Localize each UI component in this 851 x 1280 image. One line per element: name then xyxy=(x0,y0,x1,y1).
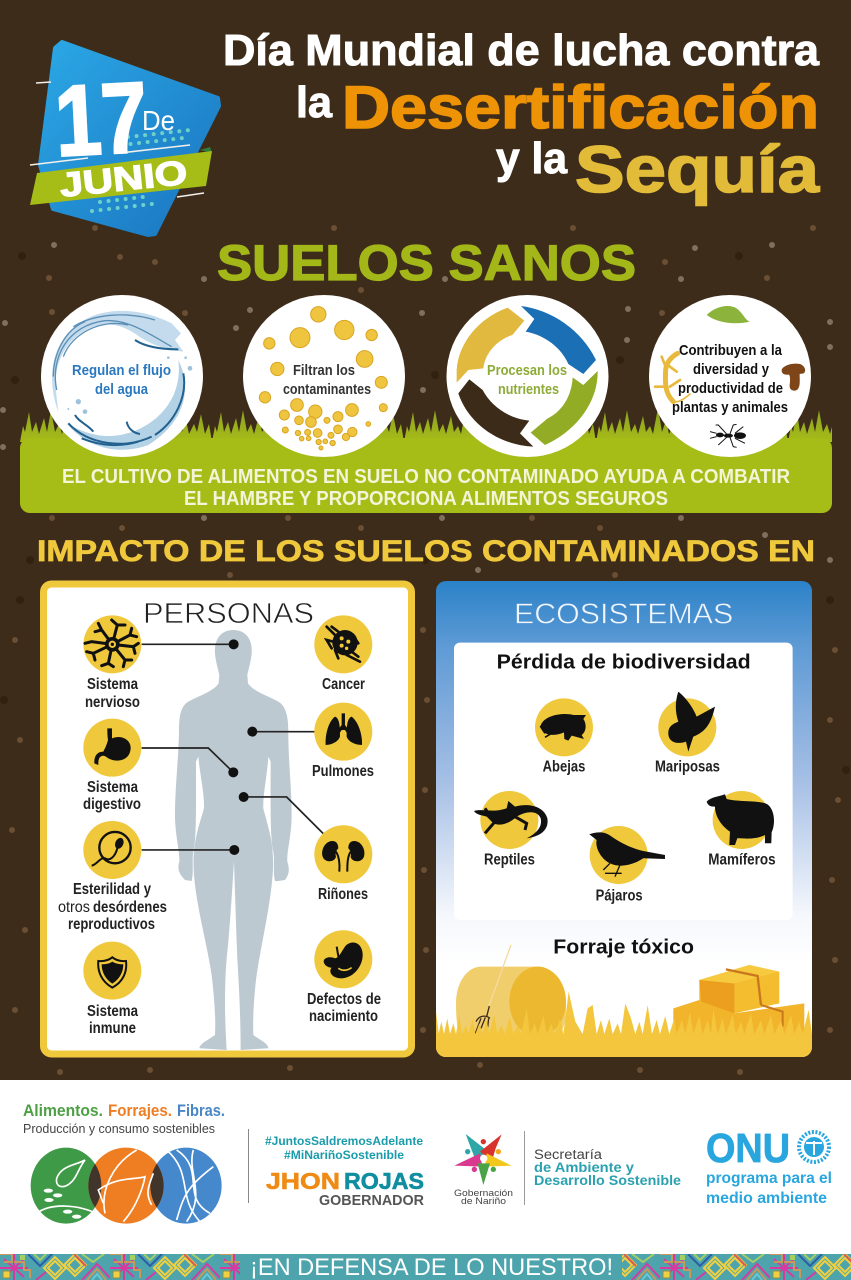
text xyxy=(283,362,371,398)
panel: personas xyxy=(44,584,412,1054)
campaign block: gobernador xyxy=(248,1129,424,1209)
campaign block: gobernador: ROJAS xyxy=(344,1168,424,1194)
labels: inmune xyxy=(89,1020,136,1037)
labels: Sistema xyxy=(87,676,138,693)
icon: bee xyxy=(535,698,593,756)
icon: leaf, gecko, mushroom, ant xyxy=(655,306,805,447)
text: Filtran los xyxy=(293,362,355,379)
heading: suelos sanos: SUELOS SANOS xyxy=(217,235,636,291)
icon: lungs xyxy=(314,703,372,761)
logo: onu medio ambiente xyxy=(706,1125,832,1207)
title: Desertificación xyxy=(342,74,819,141)
banner text xyxy=(62,466,791,510)
banner text: EL CULTIVO DE ALIMENTOS EN SUELO NO CONTAMINADO AYUDA A COMBATIR xyxy=(62,466,791,488)
heading: biodiversity: Pérdida de biodiversidad xyxy=(497,650,751,673)
logo: gobernación de nariño: Gobernación xyxy=(454,1188,513,1199)
text: Contribuyen a la xyxy=(679,342,783,359)
text: productividad de xyxy=(678,380,783,397)
labels: Defectos de xyxy=(307,991,381,1008)
biodiversity box xyxy=(454,643,793,920)
species labels: Abejas xyxy=(543,759,585,776)
title: la xyxy=(296,78,333,127)
campaign block: gobernador: GOBERNADOR xyxy=(319,1192,424,1209)
heading: toxic forage: Forraje tóxico xyxy=(553,935,694,958)
logo: onu medio ambiente: medio ambiente xyxy=(706,1190,827,1207)
icon: reproduction xyxy=(83,821,141,879)
labels: Riñones xyxy=(318,886,368,903)
campaign block: gobernador: #JuntosSaldremosAdelante xyxy=(265,1134,423,1148)
labels: nacimiento xyxy=(309,1008,378,1025)
date badge: 17 de junio xyxy=(30,42,219,235)
labels: Pulmones xyxy=(312,763,374,780)
secretaría block: Desarrollo Sostenible xyxy=(534,1173,682,1188)
title: y la xyxy=(496,134,568,183)
icon: bird xyxy=(589,826,665,884)
labels: desórdenes xyxy=(93,899,167,916)
secretaría block: Secretaría xyxy=(534,1147,603,1162)
round hay bale xyxy=(456,967,566,1037)
panel: ecosistemas xyxy=(436,581,816,1060)
labels: Esterilidad y xyxy=(73,881,151,898)
17: 17 xyxy=(52,61,150,178)
text xyxy=(487,362,567,398)
logo: gobernación de nariño: de Nariño xyxy=(461,1196,506,1207)
circle: water flow xyxy=(41,295,203,457)
text: Procesan los xyxy=(487,362,567,379)
square hay bales xyxy=(673,965,804,1037)
title: Sequía xyxy=(575,132,820,206)
icon: emblem xyxy=(799,1132,829,1162)
title: Día Mundial de lucha contra xyxy=(223,26,820,75)
secretaría block: de Ambiente y xyxy=(534,1160,635,1175)
circle: process nutrients xyxy=(446,295,608,457)
species labels: Reptiles xyxy=(484,851,535,868)
circle: biodiversity xyxy=(649,295,811,457)
dry grass xyxy=(436,992,816,1060)
labels: Sistema xyxy=(87,779,138,796)
pitchfork xyxy=(474,945,511,1036)
bottom strip xyxy=(0,1254,851,1280)
icon: bubbles xyxy=(259,307,387,450)
heading: personas: PERSONAS xyxy=(143,598,314,630)
text: contaminantes xyxy=(283,381,371,398)
JUNIO: JUNIO xyxy=(58,154,189,205)
text xyxy=(672,342,788,416)
heading: ecosistemas: ECOSISTEMAS xyxy=(514,598,733,630)
banner text: EL HAMBRE Y PROPORCIONA ALIMENTOS SEGUROS xyxy=(184,488,668,510)
icon: fetus xyxy=(314,930,372,988)
secretaría block xyxy=(524,1131,682,1205)
labels: Sistema xyxy=(87,1003,138,1020)
icon: nutrient cycle xyxy=(457,306,598,447)
icon: mammal xyxy=(707,791,774,849)
heading: impacto: IMPACTO DE LOS SUELOS CONTAMINADOS EN xyxy=(37,535,815,568)
De: De xyxy=(142,105,175,136)
labels xyxy=(58,676,381,1037)
footer white band xyxy=(0,1080,851,1254)
logo: alimentos forrajes fibras: Alimentos. xyxy=(23,1102,103,1120)
icon: water ring xyxy=(52,311,192,450)
species labels: Mamíferos xyxy=(708,851,776,868)
icon: kidneys xyxy=(314,825,372,883)
labels: digestivo xyxy=(83,796,141,813)
title xyxy=(223,26,820,206)
text: Regulan el flujo xyxy=(72,362,171,379)
icon: nervous system xyxy=(83,615,141,673)
three circles xyxy=(31,1148,222,1224)
text: plantas y animales xyxy=(672,399,788,416)
icon: stomach xyxy=(83,719,141,777)
forage scene xyxy=(436,945,816,1060)
circle: filter contaminants xyxy=(243,295,405,457)
logo: onu medio ambiente: ONU xyxy=(706,1125,790,1171)
human body xyxy=(175,630,292,1050)
green ribbon xyxy=(30,151,212,205)
connector lines xyxy=(142,644,323,850)
connector dots xyxy=(228,639,257,855)
species labels: Pájaros xyxy=(596,887,643,904)
campaign block: gobernador: #MiNariñoSostenible xyxy=(284,1148,404,1162)
logo: gobernación de nariño xyxy=(454,1134,513,1207)
labels: reproductivos xyxy=(68,916,155,933)
grass banner xyxy=(20,400,832,513)
icon: cancer xyxy=(314,615,372,673)
logo: alimentos forrajes fibras xyxy=(23,1102,225,1224)
labels: otros xyxy=(58,899,90,916)
text xyxy=(72,362,171,398)
text: diversidad y xyxy=(693,361,770,378)
labels: nervioso xyxy=(85,694,140,711)
logo: onu medio ambiente: programa para el xyxy=(706,1170,832,1187)
icon: reptile xyxy=(474,791,548,849)
labels: Cancer xyxy=(322,676,365,693)
logo: alimentos forrajes fibras: Forrajes. xyxy=(108,1102,172,1120)
text: nutrientes xyxy=(498,381,559,398)
species labels xyxy=(484,759,776,904)
icon: shield xyxy=(83,942,141,1000)
logo: alimentos forrajes fibras: Fibras. xyxy=(177,1102,225,1120)
logo: alimentos forrajes fibras: Producción y consumo sostenibles xyxy=(23,1122,215,1136)
species labels: Mariposas xyxy=(655,759,720,776)
campaign block: gobernador: JHON xyxy=(266,1168,340,1194)
text: del agua xyxy=(95,381,149,398)
icon: butterfly xyxy=(658,692,716,756)
